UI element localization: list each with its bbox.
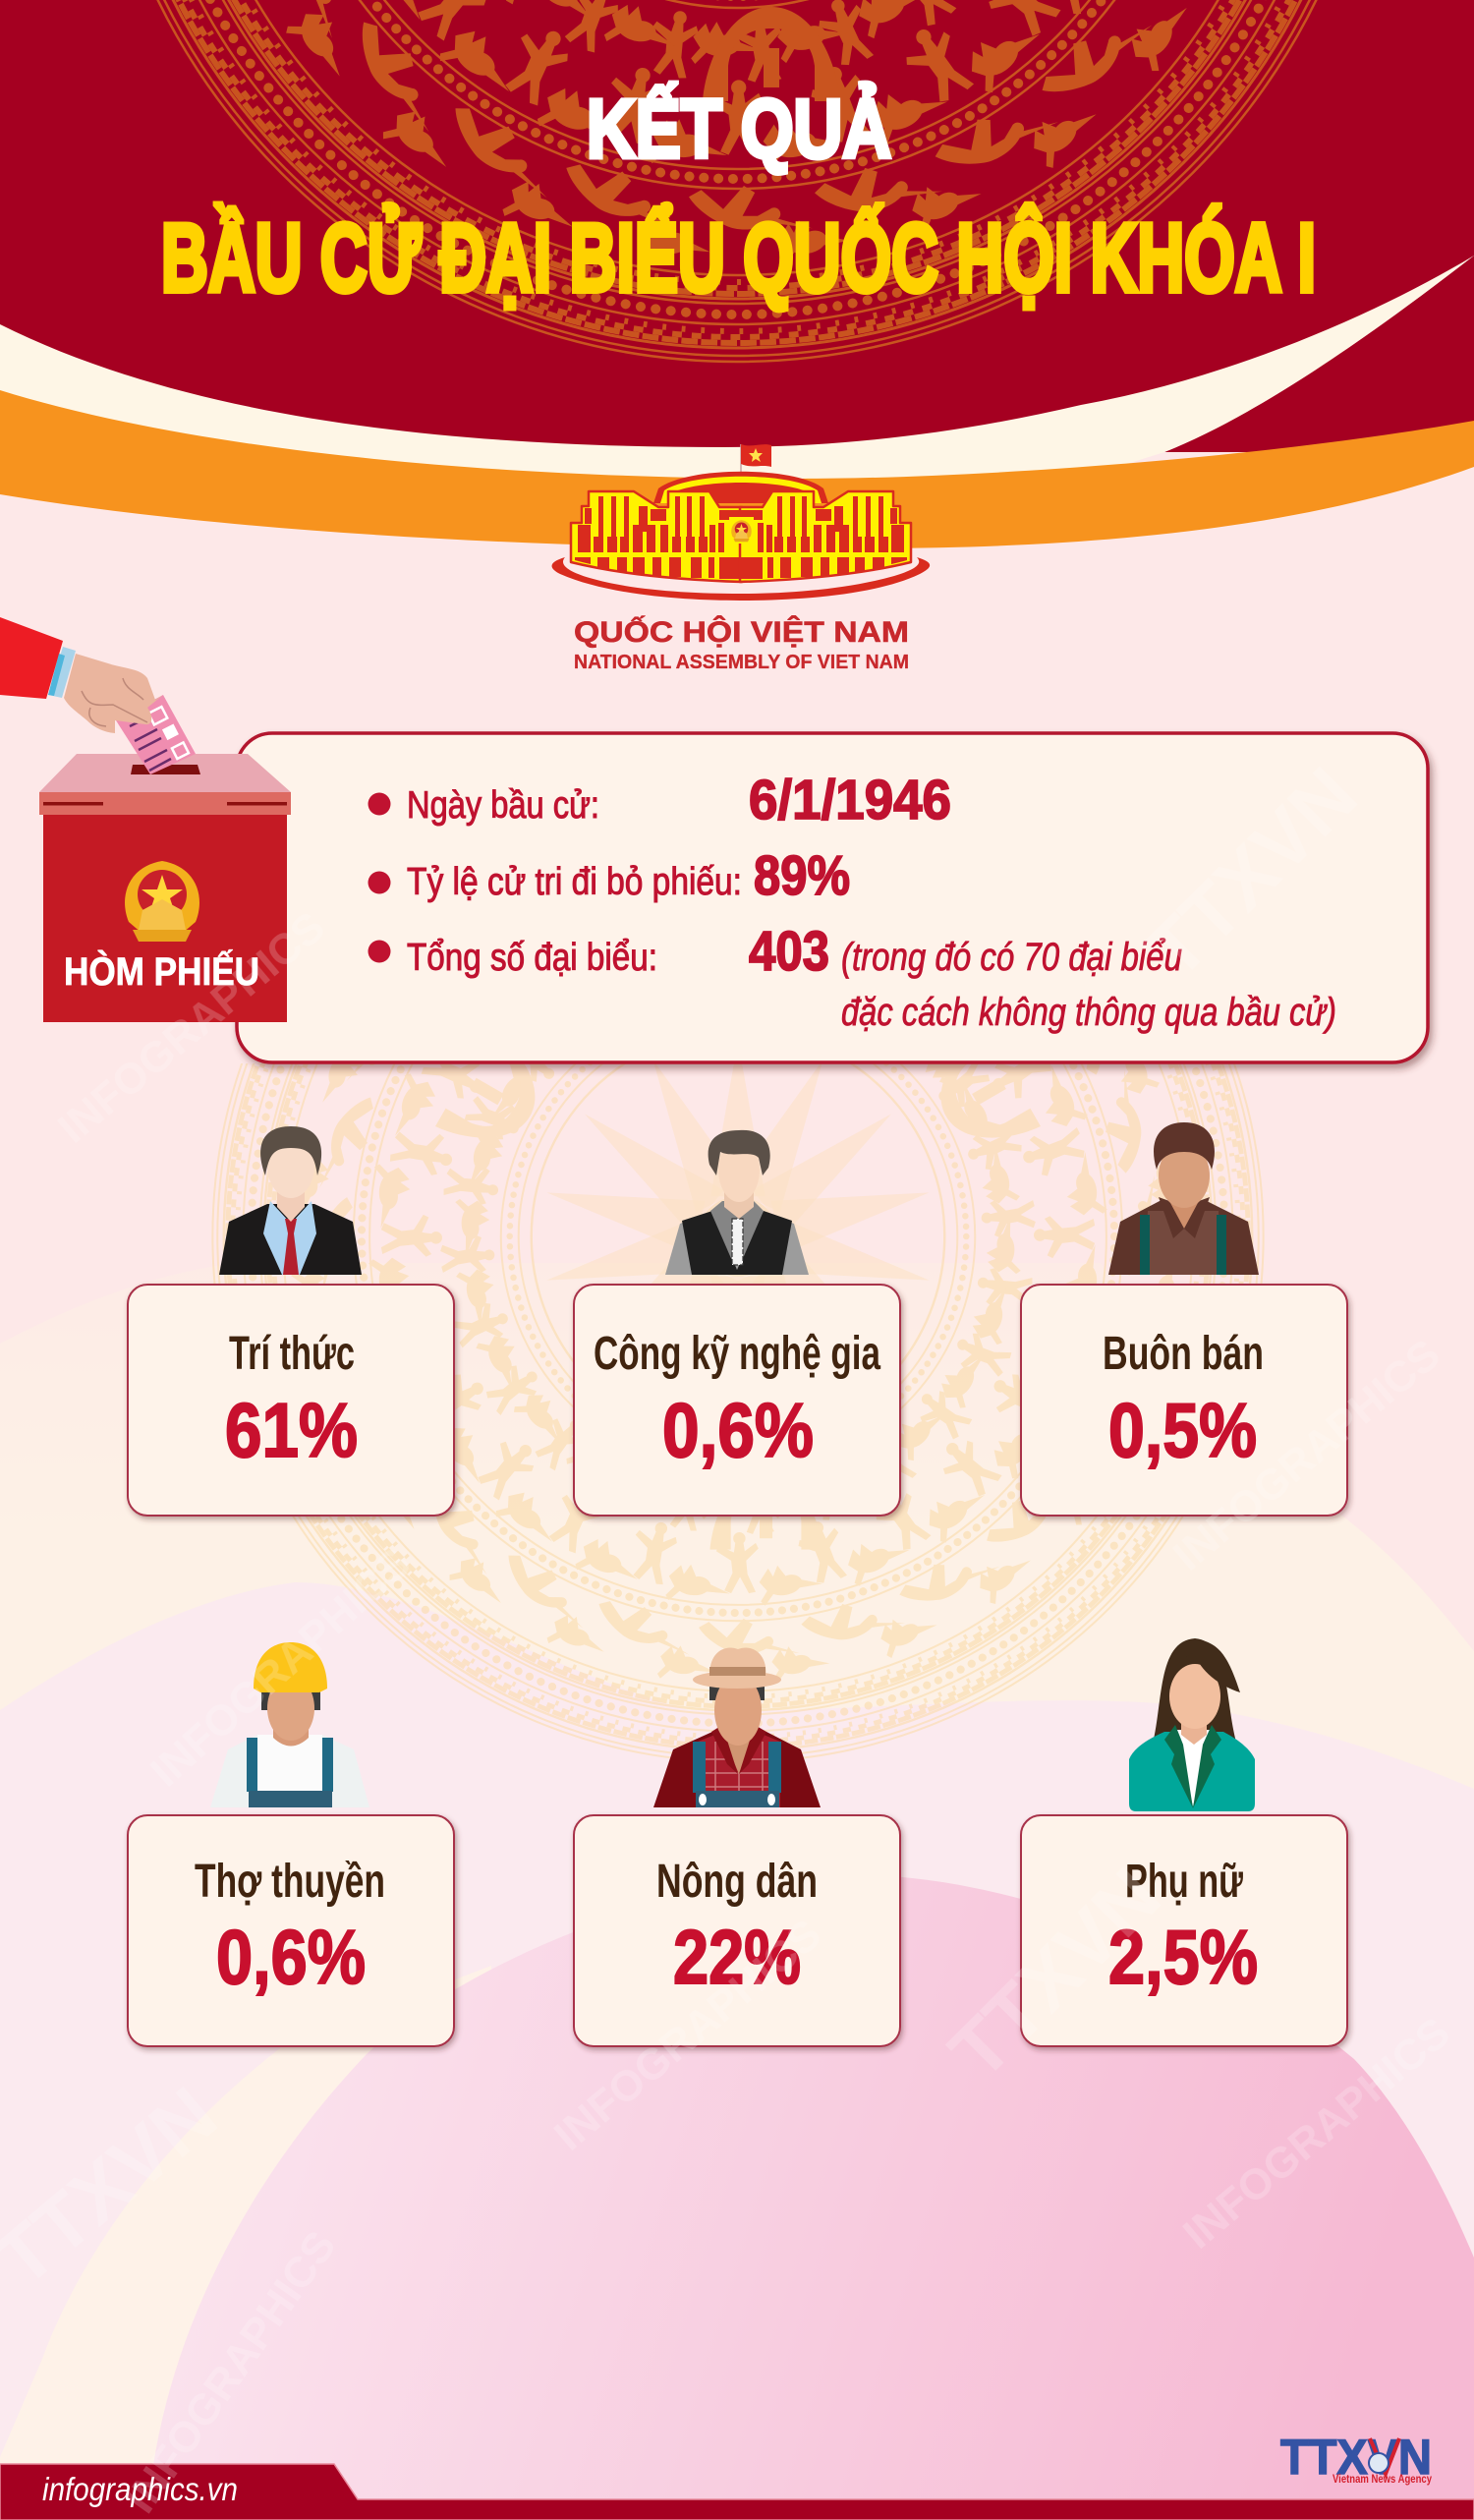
watermarks: INFOGRAPHICS xyxy=(1164,1330,1449,1580)
card: craftsmen xyxy=(574,1285,900,1516)
watermarks: TTXVN xyxy=(1129,751,1373,995)
card: women xyxy=(1021,1815,1347,2046)
card: intellectuals xyxy=(128,1285,454,1516)
footer bar xyxy=(0,2464,1474,2520)
figure: craftsman xyxy=(665,1130,809,1275)
ballot box emblem and label: HÒM PHIẾU xyxy=(64,948,259,994)
card: women: 2,5% xyxy=(1108,1914,1258,2000)
card: workers: 0,6% xyxy=(216,1914,366,2000)
title: KẾT QUẢ xyxy=(587,83,891,175)
ballot box emblem and label xyxy=(64,861,259,994)
fact: voter turnout: Tỷ lệ cử tri đi bỏ phiếu: xyxy=(407,861,742,903)
card: intellectuals: 61% xyxy=(225,1387,358,1473)
card: workers: Thợ thuyền xyxy=(195,1856,385,1908)
figure: farmer xyxy=(653,1648,821,1807)
watermarks: INFOGRAPHICS xyxy=(142,1538,420,1796)
card: traders: Buôn bán xyxy=(1103,1328,1264,1380)
card: traders xyxy=(1021,1285,1347,1516)
fact: total delegates: Tổng số đại biểu: xyxy=(407,937,657,979)
logo: TTXVN: Vietnam News Agency xyxy=(1332,2472,1432,2486)
fact: election date xyxy=(368,769,951,831)
card: farmers: Nông dân xyxy=(656,1856,818,1908)
fact: election date: 6/1/1946 xyxy=(749,769,951,831)
card: women: Phụ nữ xyxy=(1125,1856,1243,1908)
fact: total delegates xyxy=(368,920,1336,1034)
watermarks: INFOGRAPHICS xyxy=(545,1910,830,2160)
watermarks: INFOGRAPHICS xyxy=(49,902,334,1153)
figure: trader xyxy=(1108,1122,1259,1275)
fact: election date: Ngày bầu cử: xyxy=(407,784,599,827)
logo: TTXVN: TTXVN xyxy=(1280,2430,1432,2485)
header: red banner xyxy=(0,0,1474,447)
watermarks: TTXVN xyxy=(933,1852,1176,2095)
figure: intellectual xyxy=(219,1126,362,1275)
fact: voter turnout: 89% xyxy=(754,844,850,907)
logo: National Assembly building: QUỐC HỘI VIỆT NAM xyxy=(574,615,909,649)
card: farmers xyxy=(574,1815,900,2046)
figure: woman xyxy=(1129,1638,1255,1811)
card: craftsmen: Công kỹ nghệ gia xyxy=(594,1328,880,1380)
watermarks xyxy=(0,751,1459,2520)
fact: total delegates: 403 xyxy=(749,920,829,983)
background bronze drum pattern xyxy=(211,1063,1265,1759)
figure: worker xyxy=(210,1642,369,1807)
panel: election facts xyxy=(237,733,1428,1062)
fact: total delegates: đặc cách không thông qua bầu cử) xyxy=(841,991,1336,1034)
footer bar: infographics.vn xyxy=(42,2471,238,2507)
title xyxy=(161,83,1316,312)
watermarks: INFOGRAPHICS xyxy=(1174,2008,1459,2259)
card: craftsmen: 0,6% xyxy=(662,1387,814,1473)
watermarks: INFOGRAPHICS xyxy=(116,2222,346,2520)
header: orange and cream swooshes xyxy=(0,256,1474,548)
logo: National Assembly building: NATIONAL ASSEMBLY OF VIET NAM xyxy=(574,652,909,673)
card: workers xyxy=(128,1815,454,2046)
logo: National Assembly building xyxy=(552,444,930,673)
fact: total delegates: (trong đó có 70 đại biểu xyxy=(841,936,1182,979)
card: farmers: 22% xyxy=(673,1914,801,2000)
icon: ballot box with hand xyxy=(0,617,291,1022)
card: traders: 0,5% xyxy=(1108,1387,1257,1473)
card: intellectuals: Trí thức xyxy=(229,1328,355,1380)
fact: voter turnout xyxy=(368,844,850,907)
